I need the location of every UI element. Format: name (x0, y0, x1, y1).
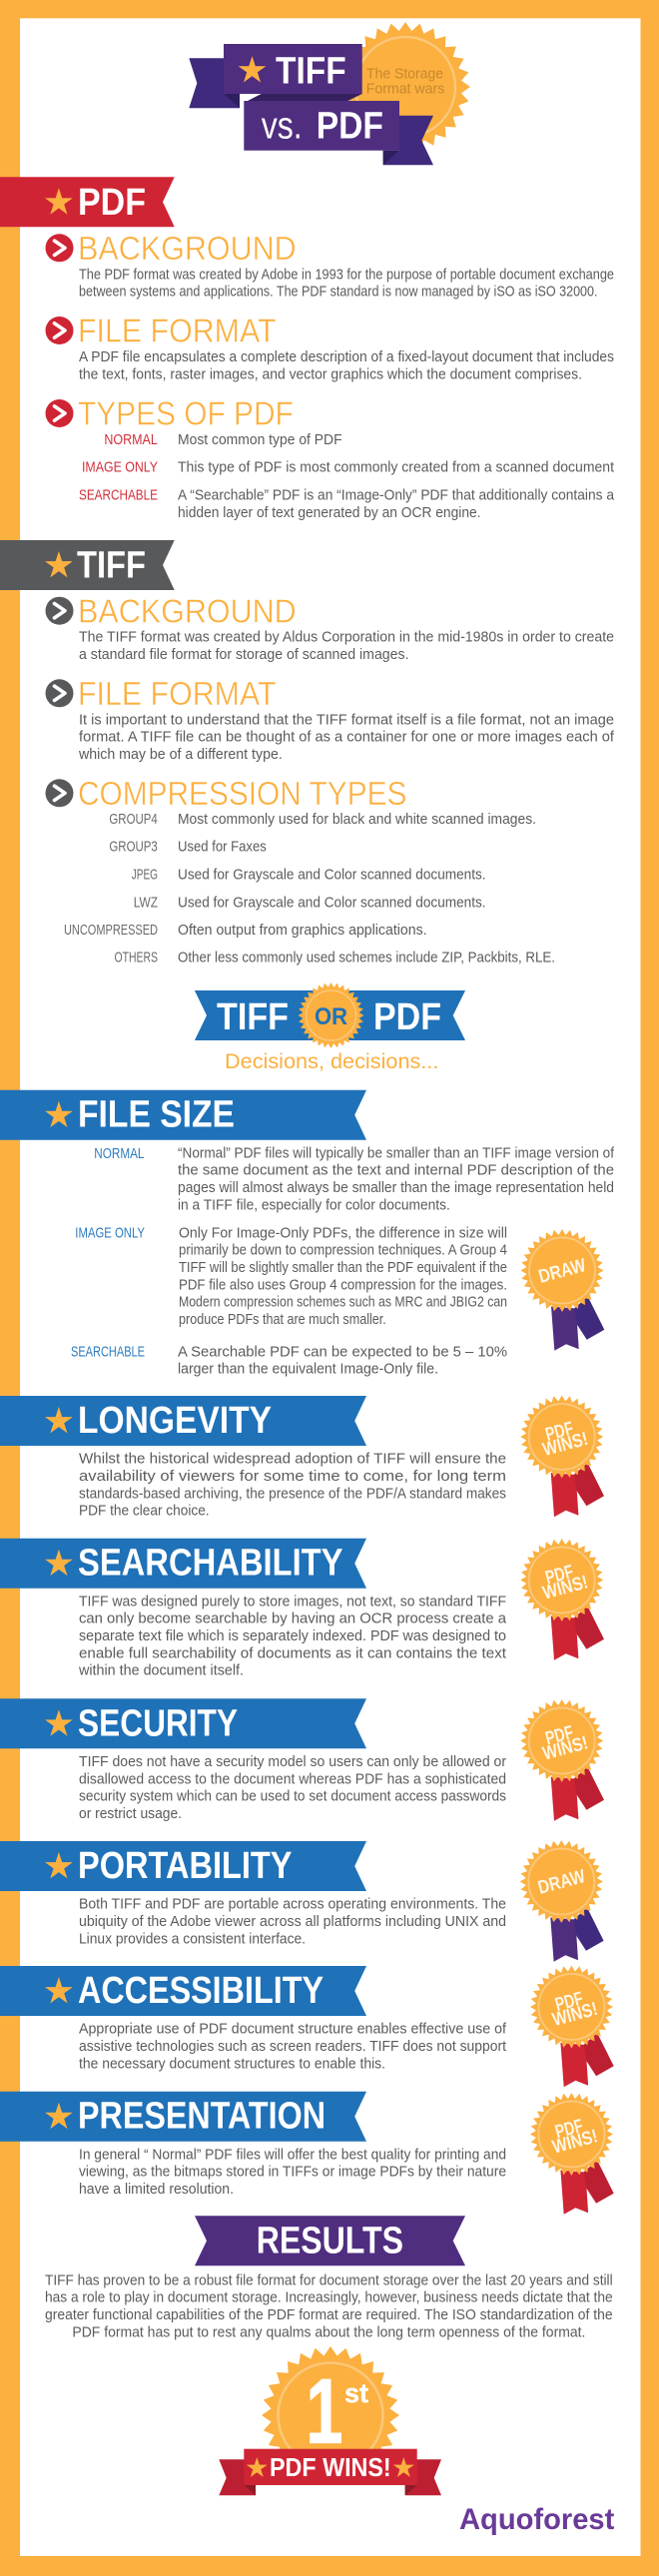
section banner: TIFF (0, 540, 175, 590)
text: TIFF background: a standard file format for storage of scanned images. (79, 647, 409, 663)
row: jpeg: JPEG (132, 867, 158, 884)
banner: file size: FILE SIZE (78, 1093, 235, 1135)
icon: PDF wins rosette: WINS! (550, 1999, 600, 2031)
text: accessibility: Appropriate use of PDF document structure enables effective use of (79, 2022, 507, 2038)
icon: chevron circle (46, 597, 74, 625)
heading: file format: FILE FORMAT (78, 313, 276, 349)
row: searchable (71, 1343, 507, 1378)
banner: accessibility: ACCESSIBILITY (78, 1970, 324, 2012)
subtitle: The Storage Format wars (366, 65, 444, 97)
text: presentation: have a limited resolution. (79, 2182, 234, 2198)
ribbon: PDF wins (219, 2449, 441, 2495)
text: security: disallowed access to the document whereas PDF has a sophisticated (79, 1771, 506, 1787)
text: PDF file format: A PDF file encapsulates a complete description of a fixed-layout document that includes (79, 349, 614, 365)
banner: searchability (0, 1539, 366, 1589)
row: group3 (109, 839, 267, 856)
banner: searchability: SEARCHABILITY (78, 1543, 343, 1585)
text: PDF file format: the text, fonts, raster images, and vector graphics which the document comprises. (79, 366, 582, 382)
row: others: OTHERS (114, 950, 158, 966)
text: security: or restrict usage. (79, 1806, 182, 1822)
title graphic: TIFF vs. PDF (189, 8, 484, 166)
text: searchability: can only become searchable by having an OCR process create a (79, 1611, 507, 1627)
text: longevity (79, 1452, 506, 1520)
text: security (79, 1754, 506, 1822)
icon: chevron circle (46, 317, 74, 344)
text: longevity: availability of viewers for some time to come, for long term (79, 1469, 506, 1485)
row: group3: Used for Faxes (178, 840, 267, 856)
text: longevity: Whilst the historical widespread adoption of TIFF will ensure the (79, 1452, 506, 1468)
icon: PDF wins rosette: PDF (553, 2116, 585, 2144)
icon: draw rosette (513, 1834, 609, 1962)
heading: types of PDF: TYPES OF PDF (78, 395, 294, 432)
TIFF: file format block (46, 675, 615, 763)
text: searchability: within the document itself. (78, 1663, 244, 1679)
row: normal (104, 431, 342, 448)
icon: chevron circle (46, 234, 74, 262)
icon: PDF wins rosette: PDF (543, 1562, 576, 1590)
section banner: TIFF: TIFF (77, 544, 146, 586)
panel: portability (0, 1834, 609, 1962)
ribbon: TIFF: TIFF (276, 50, 346, 92)
row: group4: GROUP4 (109, 811, 158, 828)
row: image only: Modern compression schemes such as MRC and JBIG2 can (179, 1295, 507, 1311)
icon: PDF wins rosette: WINS! (540, 1572, 590, 1605)
text: TIFF file format: which may be of a different type. (78, 747, 283, 763)
row: normal: pages will almost always be smaller than the image representation held (178, 1180, 614, 1196)
row: image only: TIFF will be slightly smaller than the PDF equivalent if the (179, 1260, 507, 1276)
icon: 1st seal: 1 (306, 2359, 342, 2462)
row: searchable: larger than the equivalent Image-Only file. (178, 1362, 438, 1378)
text: TIFF background (79, 630, 614, 663)
section banner: PDF (0, 177, 175, 227)
row: searchable: SEARCHABLE (79, 486, 158, 503)
text: PDF background (79, 267, 614, 301)
ribbon: vs. PDF (244, 101, 433, 165)
text: TIFF background: The TIFF format was created by Aldus Corporation in the mid-1980s in order to create (79, 630, 614, 646)
row: image only: IMAGE ONLY (75, 1224, 145, 1241)
row: image only: This type of PDF is most commonly created from a scanned document (178, 460, 614, 476)
icon: PDF wins rosette: WINS! (540, 1732, 590, 1765)
icon: PDF wins rosette (524, 2087, 619, 2215)
banner: longevity (0, 1396, 366, 1446)
icon: draw rosette (514, 1223, 610, 1351)
icon: chevron circle (46, 679, 74, 707)
text: results summary: PDF format has put to rest any qualms about the long term openness of the format. (72, 2324, 585, 2340)
text: PDF file format (79, 349, 614, 382)
row: image only (75, 1224, 507, 1328)
row: others: Other less commonly used schemes include ZIP, Packbits, RLE. (178, 951, 555, 966)
PDF: file format block (46, 313, 614, 382)
row: uncompressed (64, 922, 427, 939)
text: security: security system which can be used to set document access passwords (79, 1789, 506, 1805)
row: searchable: A “Searchable” PDF is an “Image-Only” PDF that additionally contains a (178, 487, 615, 503)
text: searchability: separate text file which is separately indexed. PDF was designed to (79, 1628, 506, 1644)
ribbon: vs. PDF: PDF (317, 105, 383, 147)
icon: PDF wins rosette (514, 1389, 610, 1517)
icon: OR seal (293, 977, 369, 1053)
text: searchability: enable full searchability of documents as it can contains the text (79, 1645, 506, 1661)
row: searchable (79, 486, 615, 521)
text: longevity: standards-based archiving, the presence of the PDF/A standard makes (79, 1486, 506, 1502)
text: results summary (45, 2272, 613, 2340)
row: normal: NORMAL (104, 431, 158, 448)
row: normal (94, 1145, 615, 1213)
row: group3: GROUP3 (109, 839, 158, 856)
banner: presentation: PRESENTATION (78, 2095, 326, 2137)
icon: PDF wins rosette: PDF (543, 1722, 576, 1750)
row: uncompressed: Often output from graphics applications. (178, 923, 427, 939)
icon: PDF wins rosette: WINS! (550, 2126, 600, 2159)
text: security: TIFF does not have a security model so users can only be allowed or (79, 1754, 506, 1770)
icon: chevron circle (46, 399, 74, 427)
banner: TIFF or PDF: PDF (373, 996, 441, 1038)
row: image only: PDF file also uses Group 4 compression for the images. (179, 1277, 507, 1293)
text: portability (79, 1897, 506, 1947)
banner: portability: PORTABILITY (78, 1845, 292, 1887)
panel: longevity (0, 1389, 610, 1520)
text: presentation: In general “ Normal” PDF files will offer the best quality for printing and (79, 2147, 506, 2163)
icon: chevron circle (46, 779, 74, 807)
icon: PDF wins rosette (514, 1693, 610, 1821)
row: lwz: Used for Grayscale and Color scanned documents. (178, 895, 486, 911)
banner: longevity: LONGEVITY (78, 1400, 272, 1442)
text: results summary: has a role to play in document storage. Increasingly, however, business needs dictate that the (45, 2290, 613, 2306)
banner: results: RESULTS (257, 2221, 403, 2262)
icon: PDF wins rosette: PDF (553, 1988, 585, 2016)
row: uncompressed: UNCOMPRESSED (64, 922, 158, 939)
icon: PDF wins rosette (514, 1533, 610, 1660)
icon: PDF wins rosette (524, 1959, 619, 2087)
banner: TIFF or PDF: TIFF (217, 996, 289, 1038)
heading: file format: FILE FORMAT (78, 675, 276, 712)
row: normal: in a TIFF file, especially for color documents. (178, 1197, 450, 1213)
section banner: PDF: PDF (78, 182, 146, 224)
text: TIFF file format: format. A TIFF file can be thought of as a container for one or more images each of (79, 730, 615, 746)
row: group4: Most commonly used for black and white scanned images. (178, 812, 536, 828)
banner: results (195, 2216, 465, 2265)
PDF: types block (46, 395, 615, 521)
panel: accessibility (0, 1959, 619, 2087)
award: 1st place PDF wins (219, 2331, 441, 2499)
banner: accessibility (0, 1966, 366, 2016)
text: accessibility: the necessary document structures to enable this. (79, 2056, 385, 2072)
tagline: decisions: Decisions, decisions... (225, 1050, 438, 1073)
icon: PDF wins rosette: PDF (543, 1418, 576, 1446)
row: normal: Most common type of PDF (178, 432, 342, 448)
text: portability: Linux provides a consistent interface. (79, 1931, 306, 1947)
text: presentation (79, 2147, 506, 2198)
text: presentation: viewing, as the bitmaps stored in TIFFs or image PDFs by their nature (79, 2165, 506, 2181)
icon: 1st seal: st (344, 2378, 368, 2408)
banner: security (0, 1698, 366, 1748)
banner: TIFF or PDF (195, 977, 465, 1053)
panel: presentation (0, 2087, 619, 2215)
heading: compression types: COMPRESSION TYPES (78, 775, 406, 812)
row: image only: produce PDFs that are much smaller. (179, 1312, 386, 1328)
panel: security (0, 1693, 610, 1822)
icon: OR seal: OR (315, 1003, 347, 1030)
PDF: background block (46, 230, 614, 301)
row: image only: primarily be down to compression techniques. A Group 4 (179, 1243, 507, 1259)
ribbon: PDF wins: PDF WINS! (270, 2452, 391, 2482)
icon: 1st seal (247, 2331, 414, 2499)
text: portability: Both TIFF and PDF are portable across operating environments. The (79, 1897, 506, 1913)
text: results summary: TIFF has proven to be a robust file format for document storage over the last 20 years and still (45, 2272, 613, 2288)
row: image only: Only For Image-Only PDFs, the difference in size will (179, 1225, 507, 1241)
banner: file size (0, 1090, 366, 1140)
row: searchable: A Searchable PDF can be expected to be 5 – 10% (178, 1344, 507, 1360)
text: accessibility: assistive technologies such as screen readers. TIFF does not support (79, 2039, 506, 2055)
logo: Aquoforest: Aquoforest (459, 2503, 614, 2536)
row: lwz: LWZ (134, 894, 158, 911)
row: searchable: hidden layer of text generated by an OCR engine. (178, 505, 481, 521)
ribbon: vs. PDF: vs. (262, 105, 303, 147)
row: searchable: SEARCHABLE (71, 1343, 145, 1360)
text: searchability: TIFF was designed purely to store images, not text, so standard TIFF (79, 1594, 506, 1610)
text: TIFF file format: It is important to understand that the TIFF format itself is a file format, not an image (79, 712, 614, 728)
banner: security: SECURITY (78, 1702, 238, 1744)
row: normal: the same document as the text and internal PDF description of the (178, 1163, 614, 1179)
ribbon: TIFF (189, 44, 362, 108)
heading: background: BACKGROUND (78, 230, 297, 267)
text: accessibility (79, 2022, 507, 2072)
heading: background: BACKGROUND (78, 592, 297, 629)
banner: presentation (0, 2092, 366, 2142)
subtitle: The Storage Format wars: The Storage (366, 65, 443, 82)
banner: portability (0, 1841, 366, 1891)
text: longevity: PDF the clear choice. (79, 1504, 210, 1520)
row: normal: “Normal” PDF files will typically be smaller than an TIFF image version of (178, 1145, 615, 1161)
icon: sunburst seal (327, 8, 484, 166)
TIFF: compression types block (46, 775, 555, 966)
panel: searchability (0, 1533, 610, 1679)
subtitle: The Storage Format wars: Format wars (366, 80, 444, 97)
text: results summary: greater functional capabilities of the PDF format are required. The ISO standardization of the (45, 2307, 613, 2323)
TIFF: background block (46, 592, 614, 663)
row: normal: NORMAL (94, 1145, 144, 1162)
icon: draw rosette: DRAW (536, 1866, 588, 1899)
text: TIFF file format (78, 712, 615, 763)
text: portability: ubiquity of the Adobe viewer across all platforms including UNIX and (79, 1914, 506, 1930)
row: jpeg: Used for Grayscale and Color scanned documents. (178, 868, 486, 884)
row: image only: IMAGE ONLY (82, 459, 158, 476)
text: searchability (78, 1594, 507, 1679)
icon: draw rosette: DRAW (536, 1255, 588, 1288)
icon: PDF wins rosette: WINS! (540, 1429, 590, 1461)
panel: file size (0, 1090, 615, 1378)
